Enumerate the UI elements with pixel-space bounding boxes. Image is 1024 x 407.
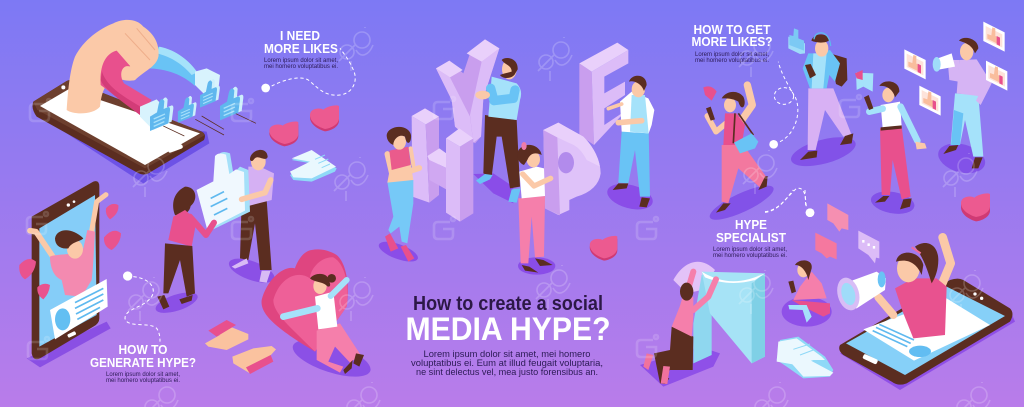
icons: hearts around phone [19,204,121,299]
person: man with backpack [788,33,859,172]
icon: thumb card [788,28,805,54]
title block: Lorem ipsum dolor sit amet, mei homero [424,349,590,360]
panel: HYPE letters and people [376,39,656,275]
icons: flying thumbs up [150,79,256,136]
dashed connector [765,190,814,217]
text: how to generate hype: GENERATE HYPE? [90,355,196,370]
letter P [543,123,601,215]
icons: peach thumbs [205,320,276,374]
text: hype specialist: Lorem ipsum dolor sit amet, [713,247,787,253]
text: hype specialist: mei homero voluptatibus ei. [713,253,787,259]
dashed connector [261,48,355,95]
icon: heart [590,236,617,261]
icon: white pointing hands [777,337,833,378]
text: how to get more likes: Lorem ipsum dolor sit amet, [695,52,769,58]
phone with megaphone woman [834,237,1015,390]
text: I need more likes: I NEED [280,28,320,43]
text: I need more likes [264,28,338,70]
person: bearded man [473,58,521,203]
text: how to generate hype: Lorem ipsum dolor sit amet, [106,372,180,378]
letter E [579,43,628,145]
title block: voluptatibus ei. Eum at illud feugait voluptaria, [411,358,603,369]
person: man in vest [604,76,656,214]
person: woman with bag [703,85,777,226]
group: man unfolding letter [640,262,765,387]
text: how to get more likes [692,22,773,64]
icons: chat bubbles [815,203,879,263]
text: how to get more likes: MORE LIKES? [692,34,773,49]
group: man and woman holding thumb [153,150,277,317]
person: woman with phone [855,70,927,217]
person: woman left [376,127,420,266]
dashed connector [123,271,160,342]
group: woman hugging heart [262,249,375,384]
panel: how to generate hype [19,150,375,384]
person: man with megaphone [933,38,992,178]
text: I need more likes: mei homero voluptatibus ei. [264,64,338,70]
icons: hearts [269,105,339,146]
person: girl in white [517,142,555,275]
text: I need more likes: MORE LIKES [264,41,338,56]
title block [406,293,610,378]
text: hype specialist: SPECIALIST [716,230,786,245]
panel: how to get more likes [692,22,1007,226]
phone with magnet [33,20,220,183]
text: how to get more likes: HOW TO GET [694,22,771,37]
text: how to generate hype: mei homero voluptatibus ei. [106,378,180,384]
icon: heart [961,195,990,221]
title block: How to create a social [413,293,603,315]
letter Y [436,39,499,143]
icon: heart [961,193,990,219]
text: hype specialist [713,217,787,259]
text: how to generate hype: HOW TO [118,342,168,357]
icon: white pointing hand [290,150,337,182]
panel: hype specialist [640,190,1015,390]
person: seated girl [782,260,832,327]
dashed connectors [765,62,814,217]
text: how to get more likes: mei homero voluptatibus ei. [695,58,769,64]
text: how to generate hype [90,342,196,384]
phone with woman [27,181,111,367]
text: hype specialist: HYPE [735,217,767,232]
panel: I need more likes [33,20,355,183]
text: I need more likes: Lorem ipsum dolor sit amet, [264,58,338,64]
icons: like cards [904,22,1007,116]
title block: MEDIA HYPE? [406,311,610,347]
letter H [412,108,473,222]
title block: ne sint delectus vel, mea justo forensibus an. [416,367,598,378]
